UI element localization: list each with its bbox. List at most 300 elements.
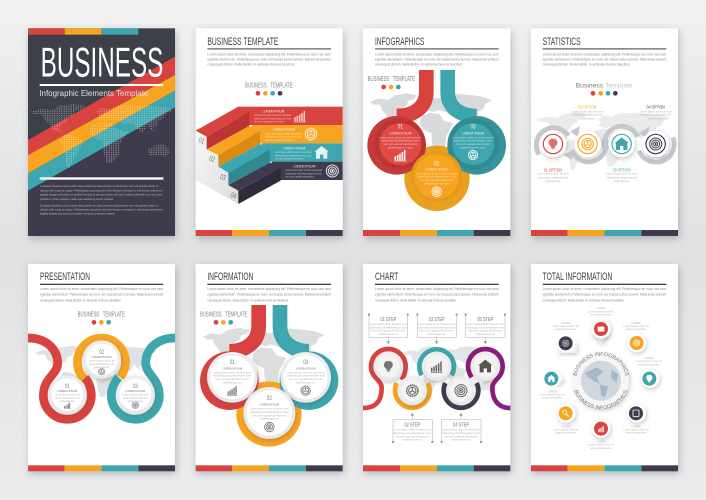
orange disc text: nec sem egestas elementum	[420, 178, 454, 182]
intro text	[543, 287, 667, 302]
caption top: amet consectetur	[591, 312, 611, 316]
step 03 label: 03 STEP	[429, 317, 445, 323]
icon: home	[315, 146, 329, 159]
ribbon orange	[395, 383, 430, 408]
page: information	[196, 264, 343, 471]
footer bar	[363, 230, 510, 236]
orange disc back	[404, 146, 470, 211]
ribbon purple	[468, 349, 510, 408]
band text teal: Lorem ipsum dolor sit amet consectetur	[275, 150, 312, 154]
intro text: consequat dictum. Nulla facilisi. In vehicula rhoncus faucibus.	[40, 298, 122, 302]
caption lower left: Lorem ipsum dolor sit	[553, 427, 579, 431]
connector arrowheads	[387, 341, 487, 416]
disc 02: pellentesque	[94, 365, 110, 369]
footer bar	[531, 230, 678, 236]
band text red	[254, 110, 292, 124]
page: business cover	[28, 28, 175, 236]
heading: CHART	[375, 271, 399, 283]
caption right: amet consectetur	[639, 362, 659, 366]
band text red: LOREM IPSUM	[262, 110, 285, 114]
ribbon dark	[444, 383, 478, 408]
pin teal right	[641, 369, 659, 388]
caption bottom: amet consectetur	[591, 446, 611, 450]
step 03 label: adipiscing elit pellentesque nunc	[418, 325, 456, 329]
caption lower right: LOREM	[631, 424, 641, 428]
disc 03: amet consectetur elit	[123, 396, 148, 400]
stair side wall	[196, 131, 238, 204]
disc 01: nec sem egestas elementum	[215, 377, 250, 381]
orange disc text: pellentesque eu nunc	[424, 181, 450, 185]
disc 02: LOREM IPSUM	[259, 403, 280, 407]
page: business template	[196, 28, 343, 236]
intro text: egestas elementum. Pellentesque eu nunc vel massa luctus laoreet. Maecenas pretium	[207, 57, 331, 61]
band text dark	[286, 165, 323, 179]
band: teal	[262, 143, 343, 162]
step 05 label: pellentesque eu	[476, 332, 495, 336]
band text orange: LOREM IPSUM	[273, 128, 295, 132]
icon: gear	[468, 150, 478, 160]
band text dark: adipiscing elit pellentesque eu nunc	[286, 171, 323, 175]
icon: bars	[394, 150, 406, 161]
intro text	[375, 287, 499, 302]
step 03 label: pellentesque eu	[427, 332, 447, 336]
stair step teal	[218, 144, 270, 185]
world map	[537, 112, 670, 172]
intro text	[207, 287, 331, 302]
step 01 label: nec sem egestas elementum	[371, 329, 406, 333]
red disc text: Lorem ipsum dolor sit amet consect	[379, 135, 422, 139]
red disc text: nec sem egestas elementum	[383, 142, 418, 146]
node 1 bulb	[540, 131, 566, 157]
subheading: BUSINESS TEMPLATE	[200, 311, 248, 318]
intro text: Lorem ipsum dolor sit amet, consectetur adipiscing elit. Pellentesque eu nunc nec sem	[543, 52, 667, 56]
step numbers: 03	[219, 172, 227, 183]
cover title: BUSINESS	[41, 38, 163, 85]
teal disc text: Lorem ipsum dolor sit amet consect	[452, 135, 494, 139]
band text dark: LOREM IPSUM	[293, 165, 316, 169]
page: presentation	[28, 264, 175, 471]
option 02 label	[571, 105, 604, 120]
top row right pair	[363, 28, 678, 236]
icon: bars	[294, 111, 306, 122]
band text red: Lorem ipsum dolor sit amet consectetur	[254, 113, 291, 117]
intro text: consequat dictum. Nulla facilisi. In vehicula rhoncus faucibus.	[207, 298, 289, 302]
heading: INFORMATION	[207, 271, 253, 283]
heading: INFOGRAPHICS	[375, 36, 424, 48]
pin orange lower left	[557, 404, 576, 423]
intro text: egestas elementum. Pellentesque eu nunc vel massa luctus laoreet. Maecenas pretium	[543, 57, 667, 61]
disc 01: pellentesque eu	[223, 380, 242, 384]
disc 03: 03	[133, 383, 138, 390]
cover body text: ultricies nibh turpis at magna. Pellentesque accumsan orci enim tempus a semper in, sed tempor ante lorem	[40, 188, 163, 192]
band text dark: Lorem ipsum dolor sit amet consectetur	[286, 168, 322, 172]
page: statistics	[531, 28, 678, 236]
band text orange: Lorem ipsum dolor sit amet consectetur	[265, 131, 302, 135]
caption left: Lorem ipsum dolor sit	[540, 392, 565, 396]
step 02 label: nec sem egestas elementum	[395, 434, 430, 438]
option 02 label: 02 OPTION	[578, 105, 597, 111]
heading: STATISTICS	[543, 36, 581, 48]
band text teal	[275, 146, 312, 161]
ribbon teal	[419, 349, 454, 375]
intro text: egestas elementum. Pellentesque eu nunc vel massa luctus laoreet. Maecenas pretium	[207, 292, 331, 296]
disc 03: nec sem egestas elementum	[289, 377, 323, 381]
step 04 label: pellentesque eu	[452, 438, 471, 442]
step 01 label: pellentesque eu	[379, 332, 398, 336]
pin red bottom	[592, 419, 610, 438]
orange disc back	[236, 381, 302, 447]
footer bar	[363, 465, 510, 471]
step 04 label: 04 STEP	[453, 423, 469, 429]
disc 01: LOREM IPSUM	[57, 389, 78, 393]
icon: gear	[305, 128, 317, 140]
footer bar	[196, 465, 343, 471]
disc 01: Lorem ipsum dolor sit amet cons	[213, 370, 252, 374]
top row left pair	[28, 28, 343, 236]
orange disc text: LOREM IPSUM	[426, 167, 448, 171]
disc 02: adipiscing elit pellentesque nunc	[250, 410, 289, 414]
disc 02: 02	[267, 395, 272, 402]
globe	[573, 353, 629, 409]
disc 03	[116, 375, 155, 414]
disc 01: 01	[230, 359, 235, 366]
colour dots	[214, 320, 233, 325]
step 04 label	[442, 423, 481, 442]
step 01 label: 01 STEP	[380, 317, 396, 323]
step 04 label: Lorem ipsum dolor sit amet cons	[442, 428, 481, 432]
colour dots	[92, 320, 111, 325]
icon: target	[326, 165, 338, 177]
caption lower left: LOREM	[561, 424, 570, 428]
caption left: amet consectetur	[542, 396, 563, 400]
step numbers: 04	[229, 190, 238, 201]
red disc text	[379, 124, 422, 149]
step 04 label: adipiscing elit pellentesque nunc	[442, 431, 481, 435]
disc 03: pellentesque eu	[296, 380, 316, 384]
option 03 label: consectetur adipiscing elit	[606, 175, 637, 179]
step 04 label: nec sem egestas elementum	[444, 434, 479, 438]
band text teal: LOREM IPSUM	[283, 146, 305, 150]
pin dark lower right	[627, 404, 646, 423]
stair step red	[196, 107, 249, 149]
step 02 label: pellentesque eu	[403, 438, 422, 442]
red disc text: adipiscing elit pellentesque nunc	[381, 139, 420, 143]
band: orange	[252, 125, 343, 143]
caption bottom: Lorem ipsum dolor sit	[588, 443, 614, 447]
caption upper right	[623, 321, 649, 331]
step disc bulb	[374, 352, 403, 381]
red disc text: LOREM IPSUM	[389, 131, 412, 135]
colour dots	[591, 91, 618, 96]
orange disc text: adipiscing elit pellentesque nunc	[418, 175, 456, 179]
pin teal left	[542, 369, 565, 388]
caption right	[636, 356, 662, 366]
step 05 label: 05 STEP	[477, 317, 493, 323]
step 01 label	[369, 317, 408, 336]
teal disc text: LOREM IPSUM	[462, 131, 484, 135]
teal disc text	[452, 124, 494, 149]
ribbon red	[28, 338, 91, 419]
caption upper right: Lorem ipsum dolor sit	[623, 324, 649, 328]
connector end markers	[368, 314, 506, 443]
caption upper left: Lorem ipsum dolor sit	[553, 324, 579, 328]
ribbon red	[363, 349, 406, 408]
footer bar	[196, 230, 343, 236]
option 01 label	[537, 167, 569, 183]
red disc text: 01	[398, 124, 403, 131]
bottom row left pair	[28, 264, 343, 471]
intro text: Lorem ipsum dolor sit amet, consectetur adipiscing elit. Pellentesque eu nunc nec sem	[207, 287, 331, 291]
disc 02: nec sem egestas elementum	[252, 413, 287, 417]
stripe: orange	[28, 75, 175, 173]
intro text	[207, 52, 331, 66]
intro text: egestas elementum. Pellentesque eu nunc vel massa luctus laoreet. Maecenas pretium	[40, 292, 164, 296]
pin dark upper left	[557, 334, 577, 353]
step 03 label: nec sem egestas elementum	[420, 329, 454, 333]
cover body text: ultricies nibh turpis at magna. Pellentesque accumsan orci enim tempus a semper in, sed tempor ante lorem	[40, 207, 163, 211]
caption upper right: amet consectetur	[626, 327, 646, 331]
intro text: consequat dictum. Nulla facilisi. In vehicula rhoncus faucibus.	[543, 298, 624, 302]
caption upper left	[553, 321, 579, 331]
caption right: LOREM	[644, 356, 654, 360]
option 03 label	[606, 167, 638, 183]
orange disc front	[411, 151, 462, 202]
subheading: Business Template	[576, 82, 633, 89]
heading: BUSINESS TEMPLATE	[207, 36, 278, 48]
step 05 label: adipiscing elit pellentesque nunc	[466, 325, 505, 329]
disc 02: Lorem ipsum dolor sit amet cons	[250, 407, 289, 411]
step numbers	[197, 135, 238, 201]
pin orange upper right	[627, 334, 646, 352]
disc 01: 01	[65, 383, 70, 390]
disc 02: pellentesque eu	[260, 417, 279, 421]
step 05 label	[466, 317, 505, 336]
red ribbon and disc	[367, 70, 426, 175]
teal disc text: 03	[470, 124, 476, 131]
step 03 label: Lorem ipsum dolor sit amet cons	[417, 322, 457, 326]
band: red	[238, 107, 343, 125]
colour dots	[381, 85, 401, 89]
intro text	[40, 287, 164, 302]
caption left	[540, 389, 565, 400]
teal disc text: adipiscing elit pellentesque nunc	[454, 139, 493, 143]
step 02 label	[393, 423, 432, 442]
option 04 label	[640, 105, 672, 120]
step 01 label: Lorem ipsum dolor sit amet cons	[369, 322, 408, 326]
disc 03: Lorem ipsum dolor sit amet cons	[286, 370, 326, 374]
caption right: Lorem ipsum dolor sit	[636, 359, 662, 363]
intro text	[375, 52, 499, 66]
caption lower left	[553, 424, 579, 435]
step 01 label: adipiscing elit pellentesque nunc	[369, 325, 408, 329]
disc 02	[82, 340, 121, 379]
disc 01: LOREM IPSUM	[222, 366, 243, 370]
intro text: Lorem ipsum dolor sit amet, consectetur adipiscing elit. Pellentesque eu nunc nec sem	[40, 287, 164, 291]
step numbers: 01	[197, 135, 206, 146]
disc 01: Lorem ipsum dolor sit	[55, 393, 80, 397]
disc 02: amet consectetur elit	[89, 362, 114, 366]
ribbon teal	[111, 338, 175, 419]
subheading: BUSINESS TEMPLATE	[368, 76, 415, 83]
cover body text: gravida in, lorem aliquam mollis ante adipiscing auctor sodales.	[40, 197, 114, 201]
intro text: egestas elementum. Pellentesque eu nunc vel massa luctus laoreet. Maecenas pretium	[375, 292, 499, 296]
band text dark: nec sem egestas elementum	[286, 175, 314, 179]
caption bottom: LOREM	[596, 439, 606, 443]
world map	[203, 328, 324, 398]
pin red top	[591, 319, 611, 344]
intro text: Lorem ipsum dolor sit amet, consectetur adipiscing elit. Pellentesque eu nunc nec sem	[375, 287, 499, 291]
disc 03: 03	[303, 359, 308, 366]
step 05 label: Lorem ipsum dolor sit amet cons	[466, 322, 505, 326]
band text teal: adipiscing elit pellentesque eu nunc	[275, 153, 312, 157]
red ribbon	[200, 305, 259, 410]
stair step orange	[207, 126, 260, 167]
option 01 label: 01 OPTION	[544, 167, 562, 173]
step 05 label: nec sem egestas elementum	[468, 329, 503, 333]
disc 03: LOREM IPSUM	[125, 389, 146, 393]
option 01 label: Lorem ipsum dolor sit amet	[537, 172, 569, 176]
icon: target	[432, 187, 441, 196]
disc 03: Lorem ipsum dolor sit	[123, 393, 148, 397]
cover subtitle: Infographic Elements Template	[39, 89, 149, 98]
band text orange: adipiscing elit pellentesque eu nunc	[265, 135, 302, 139]
disc 01	[48, 375, 87, 414]
step 03 label	[417, 317, 457, 336]
disc 01: adipiscing elit pellentesque nunc	[213, 374, 252, 378]
intro text: egestas elementum. Pellentesque eu nunc vel massa luctus laoreet. Maecenas pretium	[375, 57, 499, 61]
intro text: Lorem ipsum dolor sit amet, consectetur adipiscing elit. Pellentesque eu nunc nec sem	[543, 287, 667, 291]
option 03 label: Lorem ipsum dolor sit amet	[606, 172, 638, 176]
intro text	[543, 52, 667, 66]
band: dark	[272, 162, 343, 180]
curved text bottom: BUSINESS INFOGRAPHICS	[574, 390, 628, 410]
disc 01	[207, 352, 258, 403]
disc 03	[280, 352, 331, 403]
heading: TOTAL INFORMATION	[543, 271, 612, 283]
option 04 label: Lorem ipsum dolor sit amet	[640, 109, 672, 113]
intro text: Lorem ipsum dolor sit amet, consectetur adipiscing elit. Pellentesque eu nunc nec sem	[375, 52, 499, 56]
step 02 label: Lorem ipsum dolor sit amet cons	[393, 428, 432, 432]
intro text: consequat dictum. Nulla facilisi. In vehicula rhoncus faucibus.	[207, 62, 295, 66]
option 02 label: consectetur adipiscing elit	[572, 113, 603, 117]
disc 02: Lorem ipsum dolor sit	[89, 359, 115, 363]
caption lower left: amet consectetur	[555, 431, 576, 435]
orange disc text: Lorem ipsum dolor sit amet consect	[416, 171, 458, 175]
step 02 label: 02 STEP	[404, 423, 420, 429]
band text orange	[265, 128, 302, 142]
option 04 label: pellentesque	[648, 116, 664, 120]
step disc home	[471, 352, 500, 381]
teal ribbon	[280, 305, 338, 410]
band text teal: nec sem egestas elementum	[275, 157, 304, 161]
page: total information	[496, 262, 683, 478]
stripe: teal	[28, 91, 175, 191]
bottom row right pair	[360, 263, 683, 478]
dotted world map	[30, 104, 174, 169]
step 02 label: adipiscing elit pellentesque nunc	[393, 431, 432, 435]
grey arc arrows	[536, 126, 674, 162]
footer bar	[28, 465, 175, 471]
caption upper left: LOREM	[561, 321, 570, 325]
disc 01: pellentesque	[60, 399, 75, 403]
intro text: consequat dictum. Nulla facilisi. In vehicula rhoncus faucibus.	[375, 298, 457, 302]
option 01 label: consectetur adipiscing elit	[538, 175, 568, 179]
step disc gear	[398, 376, 427, 405]
curved text top: BUSINESS INFOGRAPHICS	[573, 352, 629, 376]
caption lower right: amet consectetur	[626, 431, 646, 435]
footer bar	[531, 465, 678, 471]
disc 03: pellentesque	[128, 399, 143, 403]
caption upper right: LOREM	[631, 321, 641, 325]
heading: PRESENTATION	[40, 271, 90, 283]
disc 03: adipiscing elit pellentesque nunc	[287, 374, 325, 378]
teal disc text: nec sem egestas elementum	[456, 142, 491, 146]
subheading: BUSINESS TEMPLATE	[78, 311, 125, 318]
intro text: consequat dictum. Nulla facilisi. In vehicula rhoncus faucibus.	[543, 62, 631, 66]
option 04 label: consectetur adipiscing elit	[640, 113, 671, 117]
caption lower right	[623, 424, 649, 435]
top colour tabs	[28, 28, 138, 35]
cover body text: In aliquam faucibus purus mauris vitae porttitor eu vitae posuere condimentum, enim elit gravida metus, in	[40, 184, 159, 188]
world map	[370, 93, 492, 163]
caption bottom	[588, 439, 614, 450]
page: chart	[363, 264, 510, 471]
ribbon orange	[77, 338, 125, 380]
subheading: BUSINESS · TEMPLATE	[245, 82, 293, 89]
caption left: LOREM	[548, 389, 557, 393]
intro text: egestas elementum. Pellentesque eu nunc vel massa luctus laoreet. Maecenas pretium	[543, 292, 667, 296]
disc 01: amet consectetur elit	[55, 396, 80, 400]
band text red: adipiscing elit pellentesque eu nunc	[254, 116, 292, 120]
option 03 label: 03 OPTION	[613, 167, 631, 173]
option 04 label: 04 OPTION	[647, 105, 665, 111]
disc 02	[243, 387, 295, 439]
caption top	[588, 306, 614, 316]
option 03 label: pellentesque	[614, 179, 630, 183]
cover body text: sagittis feugiat sed lacinia et porttitor tempus ut semper mauris vel tortor mattis sollicitudin non nec lorem	[40, 193, 163, 197]
world map	[403, 346, 496, 402]
node 2 gear	[574, 131, 601, 157]
option 01 label: pellentesque	[545, 179, 561, 183]
caption upper left: amet consectetur	[555, 327, 576, 331]
node 4 target	[642, 131, 669, 157]
intro text: consequat dictum. Nulla facilisi. In vehicula rhoncus faucibus.	[375, 62, 463, 66]
teal disc text: pellentesque eu nunc	[460, 145, 486, 149]
step numbers: 02	[208, 154, 216, 164]
teal ribbon and disc	[447, 70, 506, 175]
step disc target	[446, 376, 476, 405]
world map	[35, 346, 157, 402]
red disc text: pellentesque eu nunc	[388, 145, 414, 149]
arrow heads	[563, 126, 650, 160]
orange disc text	[416, 160, 458, 185]
page: infographics	[363, 28, 510, 236]
colour dots	[256, 91, 282, 96]
band text red: nec sem egestas elementum	[254, 120, 284, 124]
band text orange: nec sem egestas elementum	[265, 138, 294, 142]
disc 02: LOREM IPSUM	[92, 355, 112, 359]
caption top: Lorem ipsum dolor sit	[588, 309, 614, 313]
box connectors	[369, 315, 505, 442]
orange disc text: 02	[434, 160, 439, 167]
disc 02: 02	[99, 349, 104, 356]
cover body text	[40, 184, 163, 215]
caption top: LOREM	[596, 306, 606, 310]
cover body text: In aliquam faucibus purus mauris vitae porttitor eu vitae posuere condimentum, enim elit gravida metus, in	[40, 203, 159, 207]
caption lower right: Lorem ipsum dolor sit	[623, 427, 649, 431]
option 02 label: Lorem ipsum dolor sit amet	[571, 109, 604, 113]
option 02 label: pellentesque	[580, 116, 595, 120]
